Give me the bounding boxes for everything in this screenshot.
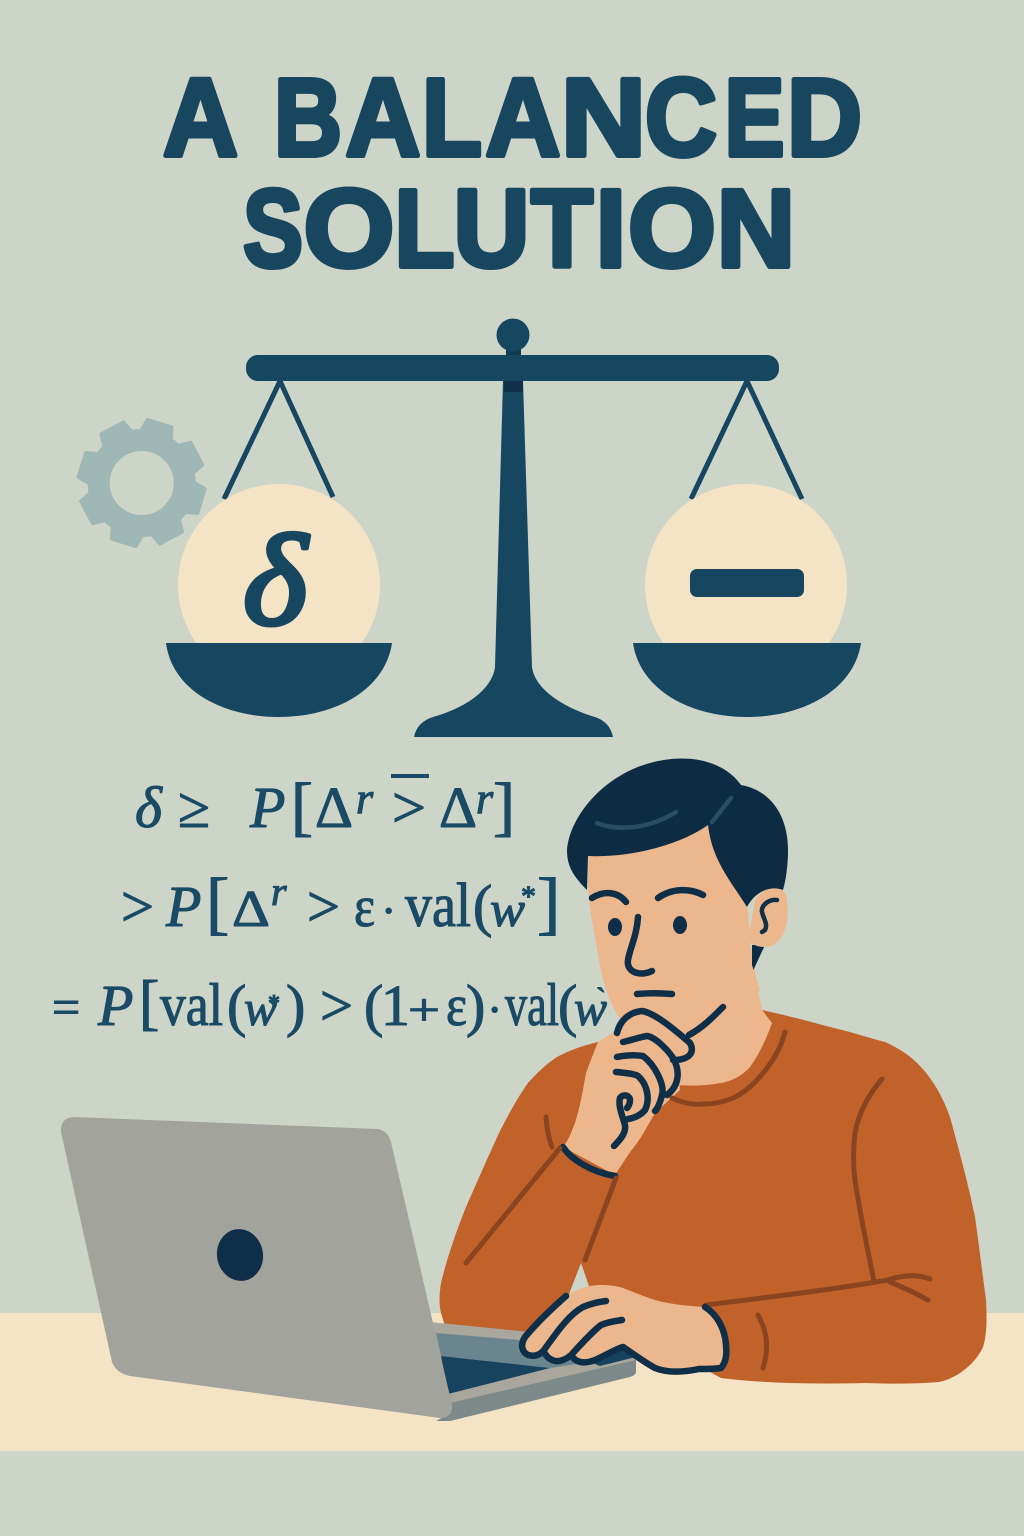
sweater seams	[466, 1032, 930, 1368]
title: I	[596, 168, 626, 290]
formula line 1: Δ	[315, 775, 353, 840]
desk	[0, 1313, 1024, 1451]
formula line 1: δ	[135, 775, 163, 840]
title: B	[274, 56, 342, 180]
laptop	[61, 1117, 636, 1421]
formula line 3: (	[364, 973, 383, 1038]
formula line 3: =	[52, 979, 80, 1035]
hair highlights	[597, 798, 731, 828]
hair	[567, 759, 788, 907]
neck	[620, 950, 772, 1086]
formula line 2: >	[307, 874, 340, 939]
face	[588, 820, 760, 1060]
gap under arm	[569, 1263, 589, 1294]
formula line 2: ]	[537, 865, 560, 942]
formula line 2: *	[521, 880, 536, 913]
formula line 3: (	[558, 973, 577, 1038]
laptop logo	[213, 1225, 267, 1285]
left disc with delta	[178, 484, 380, 686]
formula line 2: ·	[381, 885, 396, 936]
hand outline	[522, 1296, 726, 1372]
formula line 3: +	[408, 984, 440, 1035]
formula line 3: [	[139, 970, 159, 1037]
formula line 3: w	[574, 980, 607, 1036]
formula line 1	[135, 770, 515, 843]
scale top knob	[496, 318, 530, 352]
title: D	[787, 56, 862, 180]
formula line 3: )	[286, 973, 305, 1038]
formula line 2: w	[490, 881, 525, 937]
formula line 1: [	[291, 770, 313, 843]
laptop base front	[436, 1360, 636, 1421]
formula line 1: >	[392, 775, 426, 840]
person	[440, 759, 987, 1384]
typing hand	[521, 1285, 726, 1372]
title	[163, 56, 862, 290]
hand fill	[521, 1285, 726, 1372]
title: U	[454, 168, 530, 290]
title: A	[346, 56, 420, 180]
fingers	[614, 1011, 692, 1146]
sweater	[440, 1010, 987, 1384]
stand collar shadow	[504, 381, 523, 392]
raised hand and forearm	[563, 1010, 692, 1175]
left ropes	[224, 381, 333, 499]
cuff line	[563, 1147, 615, 1176]
formula line 3: w	[244, 980, 277, 1036]
right disc with minus	[645, 484, 847, 686]
scale stand	[414, 381, 613, 737]
formula line 2: >	[121, 874, 154, 939]
right ropes	[691, 381, 802, 499]
scale beam	[246, 355, 779, 381]
formula line 2: ε	[354, 874, 375, 939]
title: A	[163, 56, 238, 180]
formula line 1: ≥	[178, 775, 210, 840]
left disc with delta: δ	[243, 509, 310, 653]
scale neck	[506, 345, 521, 355]
formula line 2: [	[206, 865, 229, 942]
formula line 3: 1	[381, 973, 410, 1038]
title: N	[561, 56, 646, 180]
balance scale	[166, 318, 861, 737]
formula line 2: P	[165, 874, 201, 939]
formula line 3: ε	[446, 973, 467, 1038]
hand shadow	[588, 1347, 636, 1366]
formula line 3	[52, 970, 607, 1038]
eyes	[608, 916, 687, 936]
title: O	[628, 168, 716, 290]
right pan	[633, 643, 861, 717]
formula line 3: (	[227, 973, 246, 1038]
eyebrows	[592, 890, 703, 902]
formula line 1: r	[356, 774, 374, 823]
formula line 3: )	[466, 973, 485, 1038]
formula line 1: ]	[493, 770, 515, 843]
nose and mouth	[628, 917, 723, 1035]
formula line 3: ·	[487, 984, 502, 1035]
title: O	[304, 168, 394, 290]
title: L	[394, 168, 454, 290]
keyboard	[436, 1333, 630, 1368]
formula line 3: *	[268, 991, 280, 1017]
title: A	[486, 56, 560, 180]
formula line 3: P	[97, 973, 133, 1038]
formula line 2: (	[473, 873, 492, 938]
title: L	[422, 56, 482, 180]
formula line 3: val	[505, 972, 559, 1038]
title: C	[645, 56, 717, 180]
formula line 3: >	[320, 973, 353, 1038]
formula line 1: Δ	[439, 775, 477, 840]
back hair tip	[752, 945, 765, 973]
title: S	[243, 168, 303, 290]
title: T	[531, 168, 593, 290]
formula line 2	[121, 865, 560, 942]
formula line 1: r	[476, 774, 494, 823]
formula line 2: val	[405, 872, 471, 940]
title: N	[717, 168, 795, 290]
formula line 2: Δ	[232, 881, 270, 938]
icon: gear	[77, 419, 206, 547]
laptop base top	[430, 1322, 636, 1420]
keyboard dark well	[441, 1356, 550, 1394]
left pan	[166, 643, 392, 717]
laptop lid	[61, 1117, 452, 1418]
formula line 3: val	[160, 972, 223, 1038]
formula line 2: r	[271, 869, 287, 914]
formula line 1: P	[249, 775, 285, 840]
title: E	[724, 56, 784, 180]
ear	[748, 888, 788, 947]
formula line 3: `	[596, 982, 606, 1015]
ear detail	[762, 900, 777, 932]
